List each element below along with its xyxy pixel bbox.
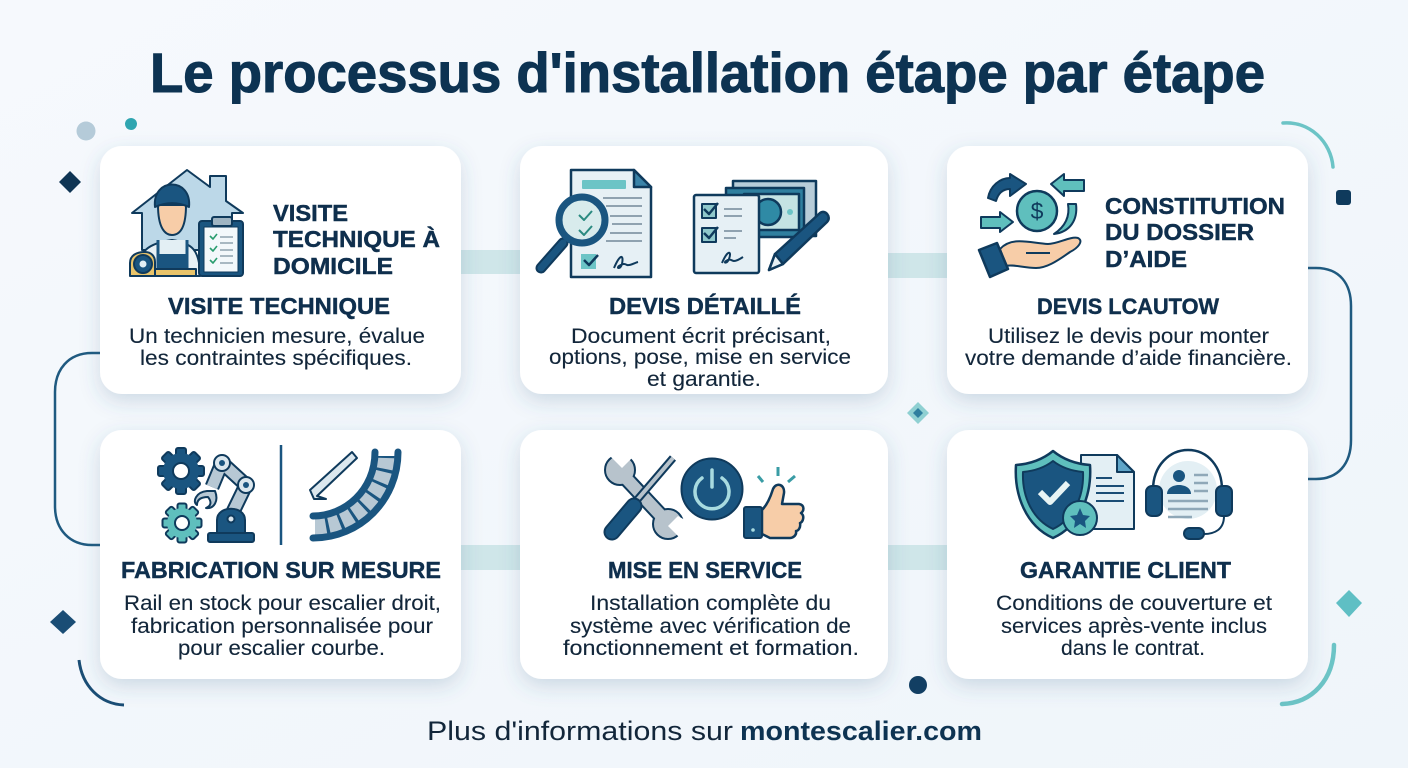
connectors between cards (55, 250, 1351, 570)
footer: Plus d'informations sur (427, 716, 733, 746)
side heading: D’AIDE (1105, 246, 1187, 272)
description: Rail en stock pour escalier droit, (124, 592, 441, 615)
icon: tools, power button, thumb up (605, 440, 803, 540)
decorative shapes (50, 118, 1362, 705)
description: options, pose, mise en service (549, 346, 851, 369)
icon: technician with house and clipboard (130, 170, 243, 276)
side heading (1105, 193, 1285, 272)
description: dans le contrat. (1061, 637, 1205, 660)
panel: devis detaille (520, 146, 888, 394)
heading: MISE EN SERVICE (608, 557, 802, 583)
description: les contraintes spécifiques. (140, 347, 412, 370)
side heading: VISITE (273, 200, 348, 226)
panel: garantie client (947, 430, 1308, 679)
description (549, 325, 851, 391)
side heading: DOMICILE (273, 253, 393, 279)
icon: hand, coin and arrows: $ (1031, 198, 1044, 224)
panel: visite technique (100, 146, 461, 394)
panel: fabrication sur mesure (100, 430, 461, 679)
description (965, 325, 1292, 370)
side heading: DU DOSSIER (1105, 219, 1254, 245)
description: Document écrit précisant, (571, 325, 831, 348)
heading: DEVIS DÉTAILLÉ (609, 292, 801, 319)
title: Le processus d'installation étape par étape (150, 41, 1265, 104)
description: Installation complète du (590, 592, 831, 615)
panel: mise en service (520, 430, 888, 679)
description: votre demande d’aide financière. (965, 347, 1292, 370)
heading: DEVIS LCAUTOW (1037, 294, 1219, 319)
description (129, 325, 425, 370)
description: système avec vérification de (570, 615, 851, 638)
side heading (273, 200, 440, 279)
icon: document and magnifier (541, 170, 829, 277)
icon: gears, robot arm, rails (158, 445, 398, 545)
icon: shield, document, headset (1016, 450, 1232, 539)
heading: GARANTIE CLIENT (1020, 557, 1231, 583)
panel: constitution du dossier (947, 146, 1308, 394)
description: Utilisez le devis pour monter (988, 325, 1269, 348)
description: fabrication personnalisée pour (131, 615, 433, 638)
footer (427, 716, 982, 746)
side heading: TECHNIQUE À (273, 225, 440, 252)
description: Conditions de couverture et (996, 592, 1272, 615)
description: services après-vente inclus (1001, 615, 1267, 638)
description: et garantie. (647, 368, 761, 391)
description: Un technicien mesure, évalue (129, 325, 425, 348)
side heading: CONSTITUTION (1105, 193, 1285, 219)
description (996, 592, 1272, 660)
description: pour escalier courbe. (178, 637, 385, 660)
description: fonctionnement et formation. (563, 637, 859, 660)
description (563, 592, 859, 660)
icon: hand, coin and arrows (979, 174, 1084, 277)
heading: FABRICATION SUR MESURE (121, 557, 441, 583)
description (124, 592, 441, 660)
footer: montescalier.com (740, 716, 982, 746)
heading: VISITE TECHNIQUE (168, 293, 390, 319)
